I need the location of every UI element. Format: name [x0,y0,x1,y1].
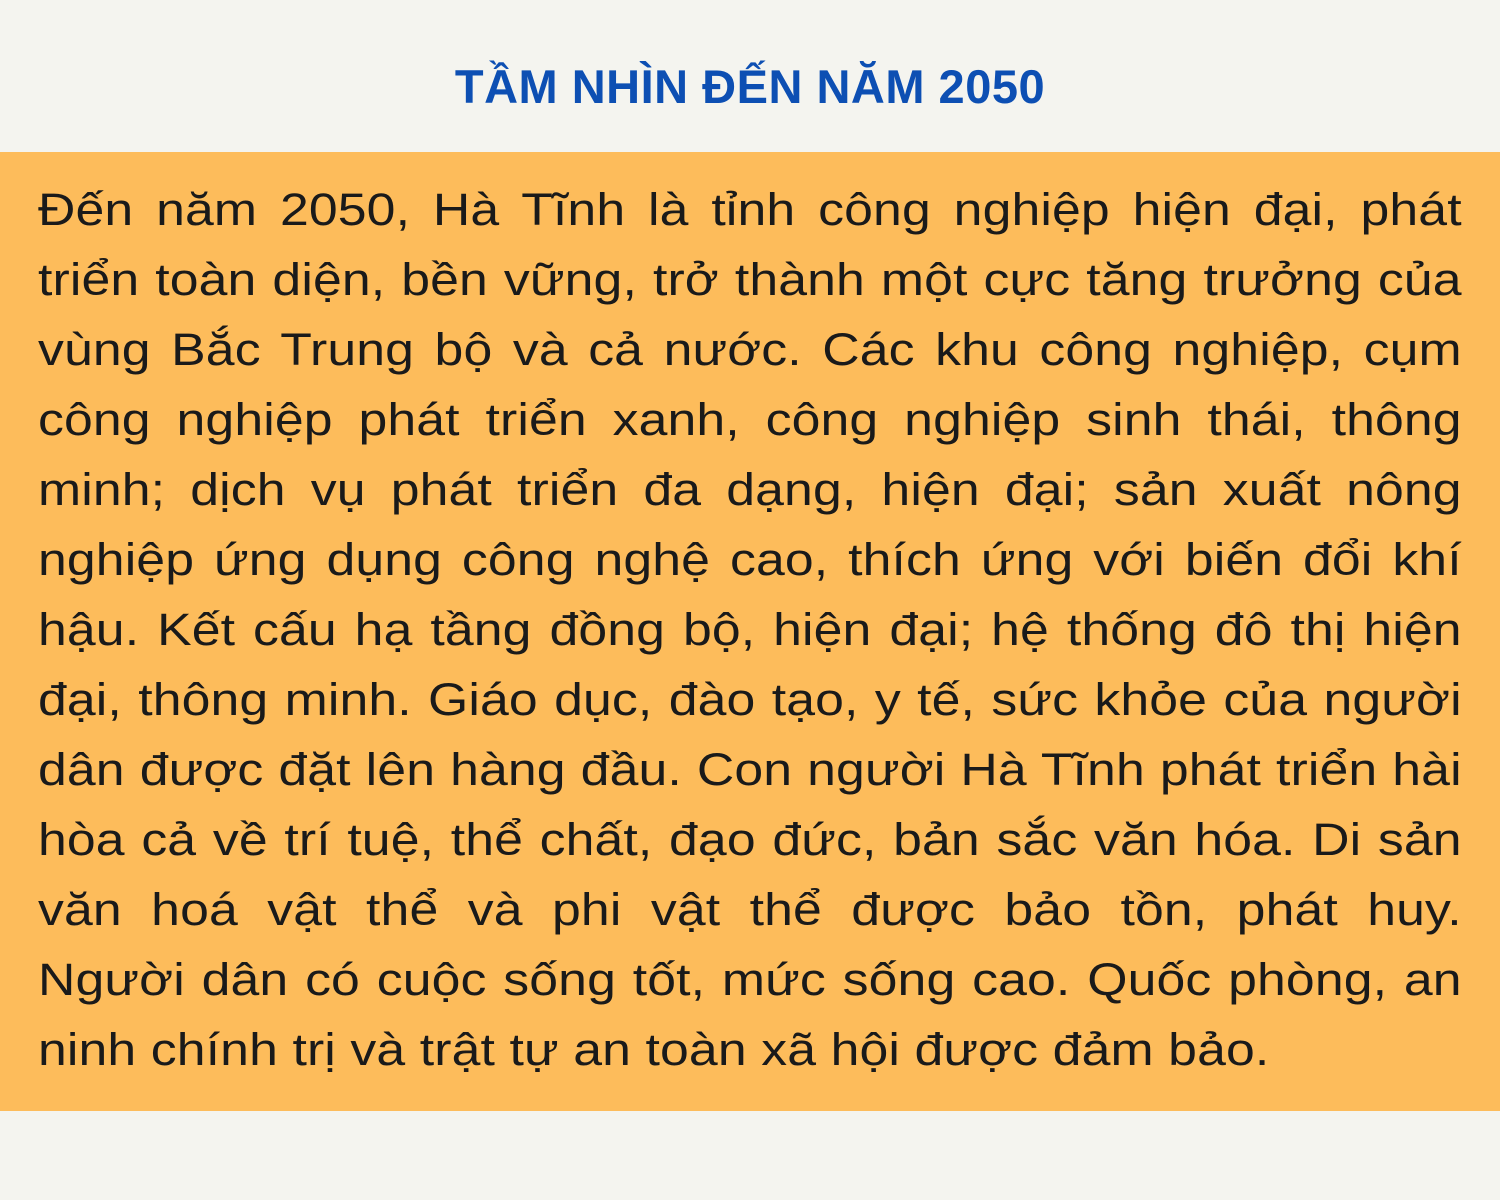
text block: vision paragraph [38,184,1462,1075]
text block: vision paragraph: ninh chính trị và trật tự an toàn xã hội được đảm bảo. [38,1024,1269,1075]
text block: vision paragraph: triển toàn diện, bền vững, trở thành một cực tăng trưởng của [38,254,1462,305]
panel: vision text [0,152,1500,1111]
text block: vision paragraph: công nghiệp phát triển xanh, công nghiệp sinh thái, thông [38,394,1462,445]
text block: vision paragraph: hậu. Kết cấu hạ tầng đồng bộ, hiện đại; hệ thống đô thị hiện [38,604,1462,655]
text block: vision paragraph: Người dân có cuộc sống tốt, mức sống cao. Quốc phòng, an [38,954,1462,1005]
text block: vision paragraph: hòa cả về trí tuệ, thể chất, đạo đức, bản sắc văn hóa. Di sản [38,814,1462,865]
text block: vision paragraph: đại, thông minh. Giáo dục, đào tạo, y tế, sức khỏe của người [38,674,1462,725]
text block: vision paragraph: Đến năm 2050, Hà Tĩnh là tỉnh công nghiệp hiện đại, phát [38,184,1462,235]
text block: vision paragraph: dân được đặt lên hàng đầu. Con người Hà Tĩnh phát triển hài [38,744,1462,795]
text block: vision paragraph: văn hoá vật thể và phi vật thể được bảo tồn, phát huy. [38,884,1462,935]
text block: vision paragraph: vùng Bắc Trung bộ và cả nước. Các khu công nghiệp, cụm [38,324,1462,375]
text block: vision paragraph: nghiệp ứng dụng công nghệ cao, thích ứng với biến đổi khí [38,534,1462,585]
text block: vision paragraph: minh; dịch vụ phát triển đa dạng, hiện đại; sản xuất nông [38,464,1462,515]
title: TẦM NHÌN ĐẾN NĂM 2050 [455,60,1045,113]
